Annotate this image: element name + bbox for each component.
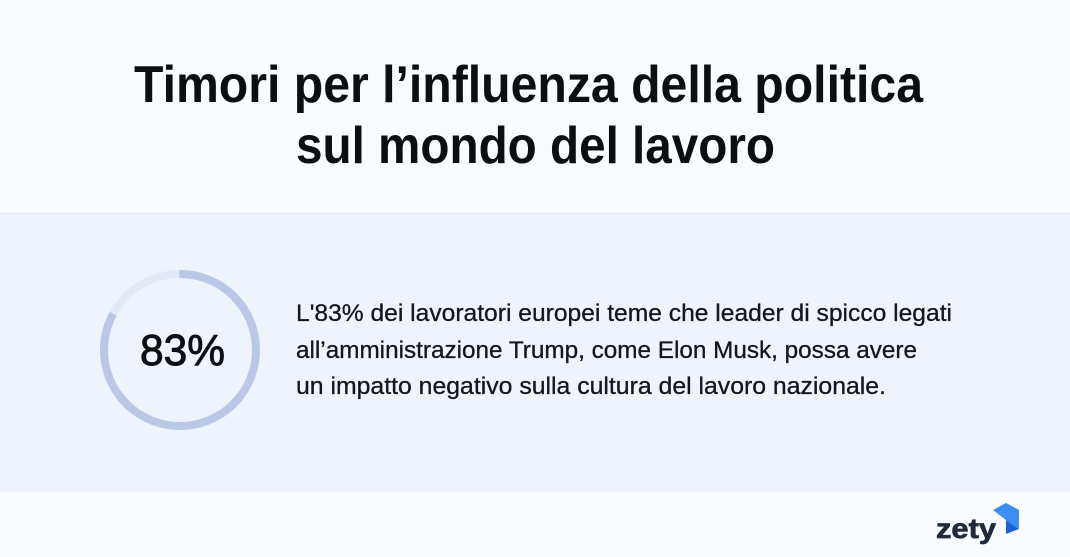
title [134, 56, 924, 175]
chart: 83% progress ring [104, 274, 256, 426]
icon: logo cube [993, 503, 1019, 534]
text block: statistic description: all’amministrazione Trump, come Elon Musk, possa avere [296, 337, 917, 364]
text block: statistic description [296, 300, 952, 400]
logo wordmark: zety [936, 513, 996, 544]
text block: statistic description: L'83% dei lavoratori europei teme che leader di spicco legati [296, 300, 952, 327]
ring value: 83% [140, 326, 225, 375]
panel: statistic band [0, 213, 1070, 492]
text block: statistic description: un impatto negativo sulla cultura del lavoro nazionale. [296, 373, 886, 400]
logo: zety [936, 503, 1019, 544]
title: Timori per l’influenza della politica [134, 56, 924, 114]
title: sul mondo del lavoro [296, 117, 775, 175]
